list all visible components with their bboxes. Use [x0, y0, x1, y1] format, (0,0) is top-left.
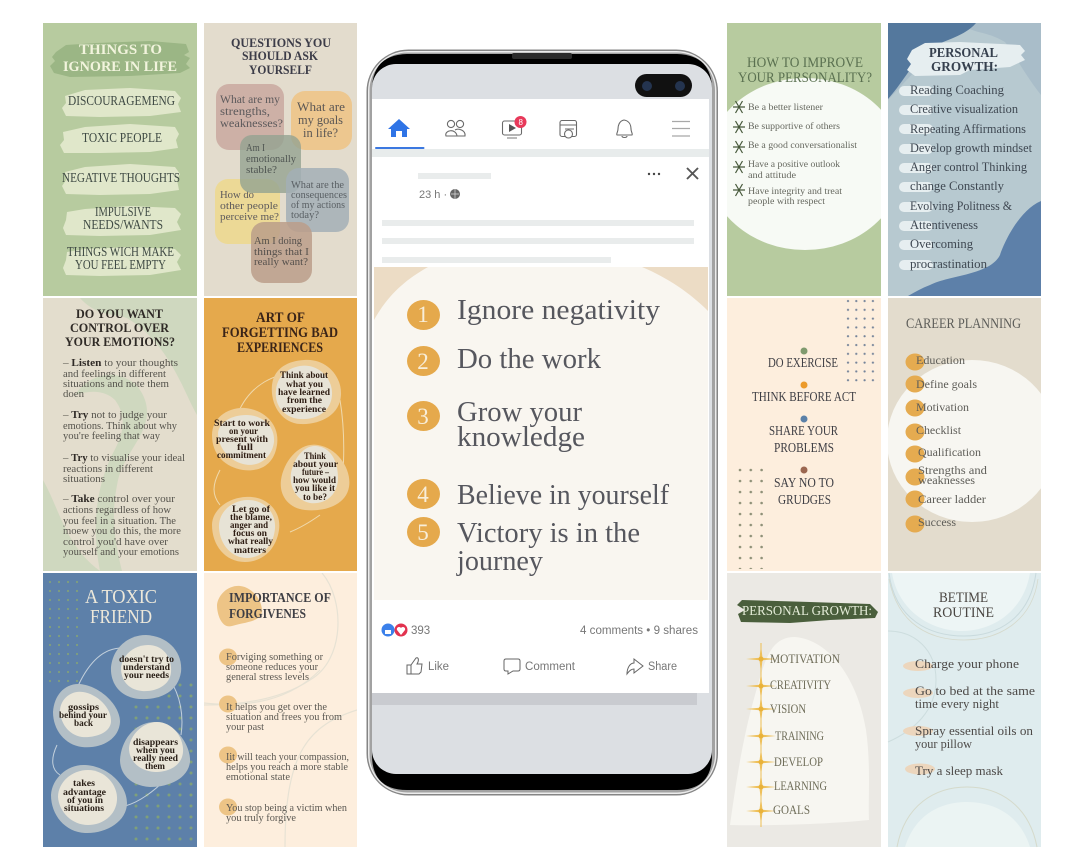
nav: video icon with badge: [502, 116, 526, 138]
action: share: Share: [648, 661, 677, 673]
blob: present: Start to work: [214, 418, 270, 428]
checklist: Have integrity and treat: [748, 187, 842, 197]
corner shapes: [374, 267, 708, 320]
title: betime routine: [933, 590, 994, 621]
item: victim: You stop being a victim when: [226, 803, 348, 814]
list text: Education: [916, 353, 965, 367]
title: importance of forgivenes: FORGIVENES: [229, 606, 306, 621]
item: think before act: THINK BEFORE ACT: [752, 389, 857, 404]
body text: emotions: situations and note them: [63, 378, 169, 390]
title: how to improve: [738, 55, 872, 86]
bubble: yellow perceive: other people: [220, 200, 278, 212]
blob: present: [212, 408, 277, 470]
blob: let go: what really: [228, 536, 274, 546]
bubble: doing things: [251, 222, 312, 283]
item: impulsive needs wants: [63, 204, 181, 236]
blob: gossips: gossips: [68, 702, 100, 712]
list text: Define goals: [916, 377, 977, 391]
connector curve: [53, 648, 182, 806]
body text: emotions: you're feeling that way: [63, 430, 160, 442]
title: betime routine: BETIME: [939, 590, 988, 606]
body text: emotions: – Take control over your: [62, 493, 175, 505]
blob: let go: anger and: [230, 520, 268, 530]
nav: bell icon: [617, 120, 632, 138]
bubble: strengths: weaknesses?: [220, 118, 283, 130]
bubble: emotionally stable: stable?: [246, 165, 277, 176]
title brush: [737, 600, 878, 623]
item 3: 3: [417, 404, 429, 429]
item 3: Grow your: [457, 397, 583, 428]
body text: emotions: emotions. Think about why: [63, 420, 177, 432]
list text: Repeating Affirmations: [910, 122, 1026, 136]
item 2: [407, 344, 601, 376]
bubble: consequences: [286, 168, 349, 232]
blob: learned: have learned: [278, 387, 330, 397]
checklist: Have a positive outlook: [748, 160, 840, 170]
bubble: emotionally stable: emotionally: [246, 154, 297, 165]
item: discouragemeng: [62, 88, 181, 117]
list text: Try a sleep mask: [915, 763, 1003, 778]
list text: Anger control Thinking: [910, 160, 1028, 174]
bubble: consequences: of my actions: [291, 200, 345, 211]
list text: [916, 353, 987, 529]
labels: [770, 651, 841, 817]
panel: bedtime routine: [888, 573, 1041, 847]
body text: emotions: [62, 357, 185, 558]
blob: takes advantage: advantage: [63, 787, 106, 797]
list text: Motivation: [916, 400, 969, 414]
item: things which make you feel empty: YOU FEEL EMPTY: [75, 257, 166, 272]
item 2: Do the work: [457, 344, 601, 375]
title: art of forgetting: EXPERIENCES: [237, 340, 323, 356]
post menu dots: [648, 173, 660, 175]
blob: future: Think: [304, 451, 326, 461]
blob: disappears: [120, 722, 190, 787]
bubble: goals: in life?: [303, 126, 338, 140]
blob: takes advantage: situations: [64, 803, 105, 813]
panel: questions you should ask yourself: [204, 23, 357, 296]
body text: emotions: control you'd have over: [63, 536, 168, 548]
nav: video icon with badge: 8: [518, 118, 524, 127]
blob: gossips: [53, 684, 120, 747]
list text: Success: [918, 515, 956, 529]
list text: [910, 83, 1033, 271]
labels: GOALS: [773, 802, 810, 817]
labels: MOTIVATION: [770, 651, 841, 666]
title: questions: YOURSELF: [249, 62, 312, 77]
panel: how to improve your personality: [727, 23, 881, 296]
nav: menu icon: [672, 122, 690, 136]
phone mockup: [366, 50, 718, 796]
bubble: yellow perceive: [215, 179, 280, 244]
body text: emotions: you feel in a situation. The: [63, 515, 176, 527]
dot field: bottom right: [131, 680, 195, 845]
item: toxic people: [60, 124, 179, 153]
item: impulsive needs wants: IMPULSIVE: [95, 204, 151, 219]
item: get over: your past: [226, 722, 264, 733]
item: compassion: emotional state: [226, 772, 290, 783]
title: control: YOUR EMOTIONS?: [65, 334, 175, 349]
blob: learned: what you: [286, 379, 323, 389]
title: things to ignore in life: IGNORE IN LIFE: [63, 59, 177, 75]
list text: time every night: [915, 696, 999, 711]
title: personal growth: [929, 46, 998, 75]
item: compassion: Iit will teach your compassion,: [226, 752, 349, 763]
background shapes: [888, 23, 1041, 296]
body text: emotions: – Try not to judge your: [62, 409, 167, 421]
nav: friends icon: [446, 120, 465, 136]
list text: change Constantly: [910, 179, 1005, 193]
reactions: [382, 624, 430, 637]
title: a toxic friend: A TOXIC: [85, 587, 157, 608]
item: reduces stress: general stress levels: [226, 672, 309, 683]
body text: emotions: – Listen to your thoughts: [62, 357, 178, 369]
action: comment: [504, 659, 576, 674]
item: compassion: [219, 746, 349, 783]
list text: Qualification: [918, 445, 981, 459]
title brush: things to ignore: [50, 41, 190, 77]
blob: disappears: them: [145, 761, 166, 771]
list text: Go to bed at the same: [915, 683, 1035, 698]
list text: Checklist: [916, 423, 962, 437]
title: importance of forgivenes: IMPORTANCE OF: [229, 590, 331, 605]
nav: watch icon: [560, 120, 576, 138]
post card background: [372, 99, 709, 693]
blob: takes advantage: [51, 765, 127, 833]
title: questions: [231, 35, 332, 77]
title: personal growth: PERSONAL GROWTH:: [742, 604, 872, 619]
labels: DEVELOP: [774, 754, 823, 769]
list text: Charge your phone: [915, 656, 1019, 671]
blob: future: future –: [302, 467, 329, 477]
blob: gossips: back: [74, 718, 93, 728]
blob: gossips: behind your: [59, 710, 107, 720]
title: personal growth: PERSONAL: [929, 46, 998, 61]
panel: a toxic friend: [43, 573, 197, 847]
panel: personal growth list: [888, 23, 1041, 296]
blob: future: to be?: [303, 492, 327, 502]
star line: [760, 643, 762, 827]
list text: [915, 656, 1035, 778]
title: control: [65, 306, 175, 349]
title: importance of forgivenes: [229, 590, 331, 621]
list text: Develop growth mindset: [910, 141, 1033, 155]
body text: emotions: yourself and your emotions: [63, 546, 179, 558]
panel: personal growth stars: [727, 573, 881, 847]
thin background arcs: [204, 573, 357, 847]
title: art of forgetting: ART OF: [256, 310, 305, 326]
body text: emotions: situations: [63, 473, 105, 485]
blob: present: full: [237, 442, 254, 452]
bubble: doing things: really want?: [254, 256, 308, 268]
orange blobs: [906, 354, 924, 532]
list text: Attentiveness: [910, 218, 978, 232]
blob: let go: the blame,: [230, 512, 272, 522]
white circle: [727, 78, 881, 250]
item: impulsive needs wants: NEEDS/WANTS: [83, 217, 163, 232]
blob: learned: Think about: [280, 370, 328, 380]
bubble: strengths: strengths,: [220, 106, 270, 118]
action: like: [407, 658, 449, 674]
body text: emotions: moew you do this, the more: [63, 525, 181, 537]
bubble: goals: [291, 91, 352, 150]
peach ovals: [903, 661, 935, 774]
panel: do you want control over your emotions: [43, 298, 197, 571]
title: questions: QUESTIONS YOU: [231, 35, 332, 50]
item: say no to grudges: [774, 466, 834, 507]
arch shape: [730, 637, 869, 825]
placeholder text lines: [382, 220, 694, 263]
post header: [418, 173, 491, 201]
title: things to ignore in life: [63, 42, 177, 75]
nav: active underline: [375, 147, 424, 149]
item 5: 5: [417, 520, 429, 545]
item: say no to grudges: SAY NO TO: [774, 475, 834, 490]
blob: disappears: when you: [136, 745, 175, 755]
list text: Strengths and: [918, 463, 987, 477]
item 3: knowledge: [457, 422, 585, 453]
item: do exercise: [768, 348, 838, 370]
title: art of forgetting: [222, 310, 338, 356]
title: a toxic friend: FRIEND: [90, 607, 152, 628]
panel: things to ignore in life: [43, 23, 197, 296]
item 1: 1: [417, 302, 429, 327]
blob: takes advantage: takes: [73, 778, 96, 788]
bubble: yellow perceive: How do: [220, 189, 254, 201]
title: how to improve: HOW TO IMPROVE: [747, 55, 863, 71]
blob: needs: doesn't try to: [119, 654, 175, 664]
title: control: DO YOU WANT: [76, 306, 163, 321]
bubble: emotionally stable: Am I: [246, 143, 265, 154]
circles: [888, 573, 1038, 847]
item: say no to grudges: GRUDGES: [778, 492, 831, 507]
post image: [374, 267, 708, 600]
body text: emotions: actions regardless of how: [63, 504, 171, 516]
item: victim: [219, 798, 348, 824]
blob: learned: from the: [287, 395, 322, 405]
reactions: 393: [411, 625, 430, 637]
checklist: Be a good conversationalist: [748, 141, 857, 151]
title: career planning: CAREER PLANNING: [906, 316, 1021, 332]
dot field: top left: [46, 578, 84, 686]
blob: needs: understand: [123, 662, 170, 672]
list text: Overcoming: [910, 237, 974, 251]
blob: takes advantage: of you in: [67, 795, 103, 805]
item 4: 4: [417, 482, 429, 507]
item: think before act: [752, 382, 857, 404]
background shapes: [43, 298, 197, 571]
phone body: [366, 50, 718, 796]
list text: Career ladder: [918, 492, 986, 506]
item: compassion: helps you reach a more stable: [226, 762, 348, 773]
body text: emotions: reactions in different: [63, 463, 153, 475]
bubble: consequences: consequences: [291, 190, 347, 201]
blob: present: on your: [229, 426, 258, 436]
labels: LEARNING: [774, 778, 827, 793]
small brushes: [899, 86, 933, 270]
checklist: people with respect: [748, 197, 825, 207]
checklist: Be supportive of others: [748, 121, 840, 132]
blob: future: about your: [293, 459, 338, 469]
item 5: journey: [456, 546, 543, 577]
list text: your pillow: [915, 736, 973, 751]
panel: career planning: [887, 298, 1057, 571]
blob: disappears: really need: [133, 753, 178, 763]
title: things to ignore in life: THINGS TO: [79, 42, 162, 58]
panel: art of forgetting bad experiences: [204, 298, 357, 571]
post header: 23 h ·: [419, 189, 447, 201]
camera pill: [635, 74, 692, 97]
item 1: Ignore negativity: [457, 295, 660, 326]
blob: needs: [111, 635, 181, 699]
blob: future: [281, 445, 349, 510]
title: a toxic friend: [85, 587, 157, 628]
title: control: CONTROL OVER: [70, 320, 170, 335]
bubble: consequences: today?: [291, 210, 320, 221]
list text: Reading Coaching: [910, 83, 1005, 97]
panel: importance of forgiveness: [204, 573, 357, 847]
item 2: 2: [417, 349, 429, 374]
blob: disappears: disappears: [133, 737, 179, 747]
bubble: doing things: Am I doing: [254, 235, 302, 247]
item: reduces stress: [219, 648, 323, 683]
title: questions: SHOULD ASK: [242, 48, 319, 63]
item: victim: you truly forgive: [226, 813, 296, 824]
blob: future: you like it: [295, 483, 335, 493]
comment and share counts: 4 comments • 9 shares: [580, 625, 698, 637]
item: get over: [219, 696, 342, 733]
action: like: Like: [428, 661, 449, 673]
title brush: [907, 42, 1025, 76]
blob: future: how would: [293, 475, 336, 485]
bubble: goals: my goals: [298, 113, 343, 127]
list text: Creative visualization: [910, 102, 1019, 116]
dot field: top right: [844, 298, 880, 383]
bubble: yellow perceive: perceive me?: [220, 211, 279, 223]
nav: home icon: [388, 119, 410, 137]
title: betime routine: ROUTINE: [933, 605, 994, 621]
close icon: [687, 168, 698, 179]
item: reduces stress: Forviging something or: [226, 652, 323, 663]
lower shadow bar: [372, 693, 697, 705]
blob: present: commitment: [217, 450, 266, 460]
action: share: [627, 659, 677, 674]
screen: [372, 64, 712, 774]
blob: needs: your needs: [124, 670, 170, 680]
item 5: Victory is in the: [457, 518, 640, 549]
item 5: [407, 517, 640, 577]
item 4: Believe in yourself: [457, 480, 670, 511]
blob: learned: [272, 360, 341, 424]
checklist: and attitude: [748, 171, 796, 181]
blob: let go: focus on: [233, 528, 267, 538]
white circle: [887, 360, 1057, 522]
title: art of forgetting: FORGETTING BAD: [222, 325, 338, 341]
blob: present: present with: [216, 434, 268, 444]
labels: VISION: [770, 701, 806, 716]
item: discouragemeng: DISCOURAGEMENG: [68, 93, 175, 108]
dot field: bottom left: [735, 465, 769, 569]
item: toxic people: TOXIC PEOPLE: [82, 130, 162, 145]
item: negative thoughts: [62, 164, 180, 195]
item: share your problems: SHARE YOUR: [769, 423, 838, 438]
blob: let go: [212, 497, 279, 562]
connector curve: [214, 373, 344, 532]
item: share your problems: [769, 416, 838, 455]
divider: [372, 149, 709, 157]
list text: procrastination: [910, 257, 988, 271]
checklist: [733, 101, 857, 207]
blob: let go: matters: [234, 545, 267, 555]
labels: TRAINING: [775, 728, 824, 743]
blob: let go: Let go of: [232, 504, 271, 514]
title blob: [217, 586, 262, 626]
title: how to improve: YOUR PERSONALITY?: [738, 70, 872, 86]
bubble: emotionally stable: [240, 135, 301, 193]
bubble: strengths: [216, 84, 284, 150]
item: do exercise: DO EXERCISE: [768, 355, 838, 370]
item 1: [407, 295, 660, 330]
item: get over: situation and frees you from: [226, 712, 342, 723]
item: reduces stress: someone reduces your: [226, 662, 318, 673]
item: share your problems: PROBLEMS: [774, 440, 834, 455]
bubble: doing things: things that I: [254, 246, 309, 258]
item: things which make you feel empty: THINGS WICH MAKE: [67, 244, 174, 259]
item: get over: It helps you get over the: [226, 702, 327, 713]
speaker grille: [512, 53, 572, 59]
bubble: strengths: What are my: [220, 94, 280, 106]
title: personal growth: GROWTH:: [931, 60, 998, 75]
item: things which make you feel empty: [63, 244, 181, 276]
blob: learned: experience: [282, 404, 326, 414]
bubble: goals: What are: [297, 100, 345, 114]
panel: do exercise: [727, 298, 881, 571]
bubble: consequences: What are the: [291, 180, 345, 191]
list text: weaknesses: [918, 473, 975, 487]
list text: Spray essential oils on: [915, 723, 1033, 738]
item 3: [407, 397, 585, 453]
body text: emotions: – Try to visualise your ideal: [62, 452, 185, 464]
list text: Evolving Politness &: [910, 199, 1012, 213]
labels: CREATIVITY: [770, 677, 831, 692]
body text: emotions: doen: [63, 388, 84, 400]
action: comment: Comment: [525, 661, 576, 673]
checklist: Be a better listener: [748, 103, 824, 113]
item: negative thoughts: NEGATIVE THOUGHTS: [62, 170, 180, 185]
stars: [746, 645, 776, 825]
body text: emotions: and feelings in different: [63, 368, 166, 380]
